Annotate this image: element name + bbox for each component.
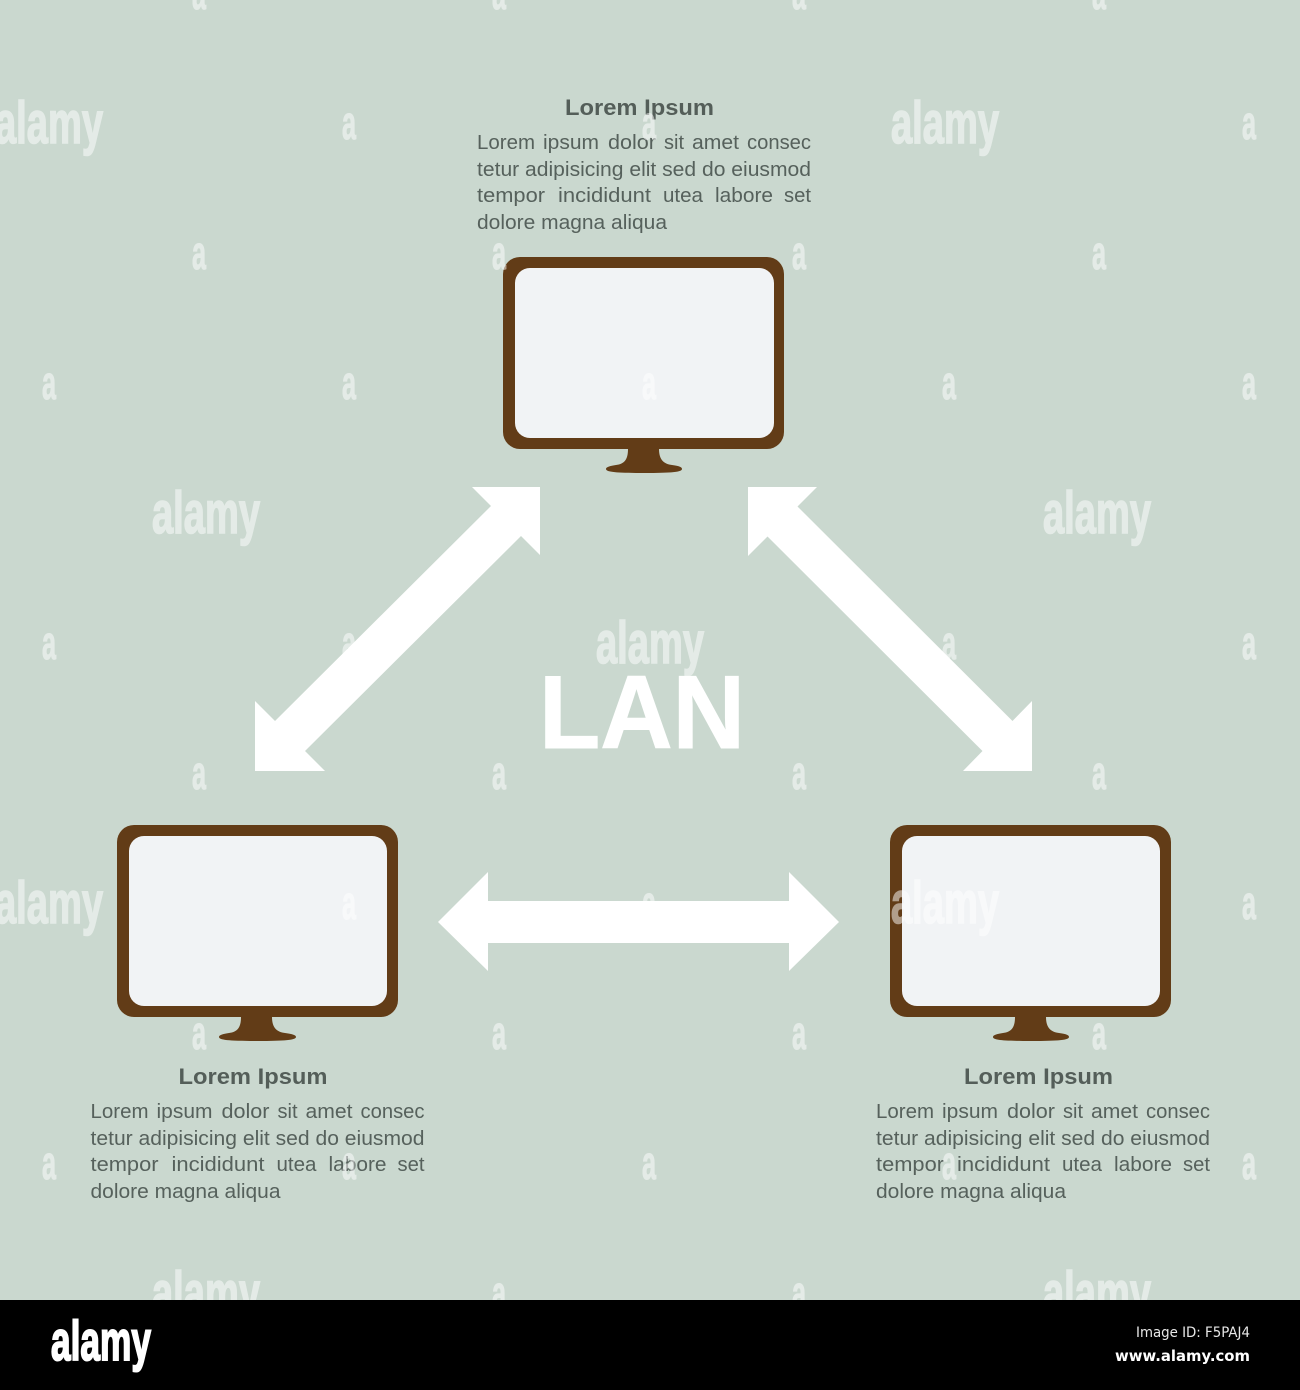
text block: top — [477, 95, 811, 234]
body text: top: labore — [715, 185, 773, 207]
body text: left: tetur adipisicing elit sed do eiusmod — [90, 1128, 424, 1150]
watermark pattern: a — [492, 1266, 506, 1319]
body text: top: set — [784, 185, 811, 207]
body text: left: amet — [306, 1101, 353, 1123]
watermark pattern: a — [642, 96, 656, 149]
footer bar — [0, 1300, 1300, 1390]
body text: right: ipsum — [942, 1101, 998, 1123]
body text: top: dolor — [608, 132, 656, 154]
watermark pattern: alamy — [891, 870, 999, 936]
footer logo: alamy — [51, 1309, 151, 1372]
watermark pattern: a — [1092, 1006, 1106, 1059]
watermark pattern: alamy — [596, 610, 704, 676]
body text: right: incididunt — [957, 1154, 1050, 1176]
body text: left: tempor — [90, 1154, 159, 1176]
watermark pattern: a — [942, 1136, 956, 1189]
body text: left: set — [398, 1154, 425, 1176]
heading: top: Lorem Ipsum — [565, 95, 714, 120]
body text: right: consec — [1146, 1101, 1210, 1123]
body text: right — [876, 1101, 1210, 1203]
body text: top: consec — [747, 132, 811, 154]
watermark pattern: a — [792, 1266, 806, 1319]
heading: left: Lorem Ipsum — [178, 1064, 328, 1089]
watermark pattern: alamy — [1043, 480, 1151, 546]
body text: left: dolore magna aliqua — [90, 1181, 281, 1203]
watermark pattern: a — [1092, 746, 1106, 799]
body text: right: labore — [1114, 1154, 1172, 1176]
watermark pattern: alamy — [1043, 1260, 1151, 1326]
icon: left monitor — [117, 825, 398, 1041]
body text: top: tempor — [477, 185, 545, 207]
watermark pattern: a — [1242, 356, 1256, 409]
text block: left — [90, 1064, 425, 1203]
watermark pattern: a — [942, 616, 956, 669]
arrow: left to right monitor — [438, 872, 839, 971]
body text: top — [477, 132, 811, 234]
watermark pattern: a — [342, 616, 356, 669]
heading: right: Lorem Ipsum — [964, 1064, 1113, 1089]
body text: top: incididunt — [558, 185, 651, 207]
footer url: www.alamy.com — [1115, 1347, 1250, 1365]
body text: right: amet — [1091, 1101, 1138, 1123]
body text: left: sit — [278, 1101, 298, 1123]
watermark pattern: a — [1242, 96, 1256, 149]
body text: left: ipsum — [156, 1101, 212, 1123]
watermark pattern: a — [192, 1006, 206, 1059]
watermark pattern: a — [492, 1006, 506, 1059]
watermark pattern: alamy — [891, 90, 999, 156]
watermark pattern: alamy — [152, 1260, 260, 1326]
body text: right: set — [1183, 1154, 1210, 1176]
body text: left: dolor — [222, 1101, 270, 1123]
icon: right monitor — [890, 825, 1171, 1041]
body text: top: ipsum — [543, 132, 599, 154]
body text: right: dolore magna aliqua — [876, 1181, 1067, 1203]
body text: top: utea — [663, 185, 704, 207]
watermark pattern: a — [42, 356, 56, 409]
body text: right: tetur adipisicing elit sed do eiusmod — [876, 1128, 1210, 1150]
watermark pattern: a — [342, 96, 356, 149]
footer image id: Image ID: F5PAJ4 — [1136, 1325, 1250, 1341]
watermark pattern: a — [1092, 226, 1106, 279]
watermark pattern: a — [942, 356, 956, 409]
watermark pattern: alamy — [0, 90, 103, 156]
watermark pattern: a — [492, 746, 506, 799]
body text: right: tempor — [876, 1154, 944, 1176]
body text: left: Lorem — [90, 1101, 148, 1123]
watermark pattern: alamy — [152, 480, 260, 546]
body text: top: Lorem — [477, 132, 535, 154]
watermark pattern: a — [792, 1006, 806, 1059]
text block: right — [876, 1064, 1210, 1203]
body text: left: labore — [328, 1154, 386, 1176]
watermark pattern: a — [492, 226, 506, 279]
watermark pattern: a — [192, 746, 206, 799]
body text: right: dolor — [1007, 1101, 1055, 1123]
watermark pattern: a — [642, 356, 656, 409]
body text: left: incididunt — [172, 1154, 265, 1176]
watermark pattern: a — [1242, 616, 1256, 669]
watermark pattern: a — [42, 616, 56, 669]
title: LAN: LAN — [539, 655, 745, 771]
body text: top: tetur adipisicing elit sed do eiusmod — [477, 159, 811, 181]
watermark pattern: a — [1242, 876, 1256, 929]
arrow: top to left monitor — [255, 487, 540, 771]
watermark pattern: a — [642, 1136, 656, 1189]
watermark pattern: a — [1242, 1136, 1256, 1189]
arrow: top to right monitor — [748, 487, 1032, 771]
body text: right: utea — [1062, 1154, 1103, 1176]
watermark pattern: alamy — [0, 870, 103, 936]
body text: right: sit — [1063, 1101, 1083, 1123]
watermark pattern: a — [42, 1136, 56, 1189]
body text: top: dolore magna aliqua — [477, 212, 668, 234]
body text: top: sit — [664, 132, 684, 154]
watermark pattern: a — [342, 356, 356, 409]
watermark pattern: a — [342, 876, 356, 929]
body text: top: amet — [692, 132, 739, 154]
watermark pattern: a — [642, 876, 656, 929]
icon: top monitor — [503, 257, 784, 473]
body text: left: consec — [360, 1101, 424, 1123]
body text: left: utea — [276, 1154, 317, 1176]
watermark pattern: a — [192, 226, 206, 279]
body text: left — [90, 1101, 425, 1203]
watermark pattern: a — [792, 746, 806, 799]
watermark pattern: a — [792, 226, 806, 279]
watermark pattern: a — [342, 1136, 356, 1189]
body text: right: Lorem — [876, 1101, 934, 1123]
